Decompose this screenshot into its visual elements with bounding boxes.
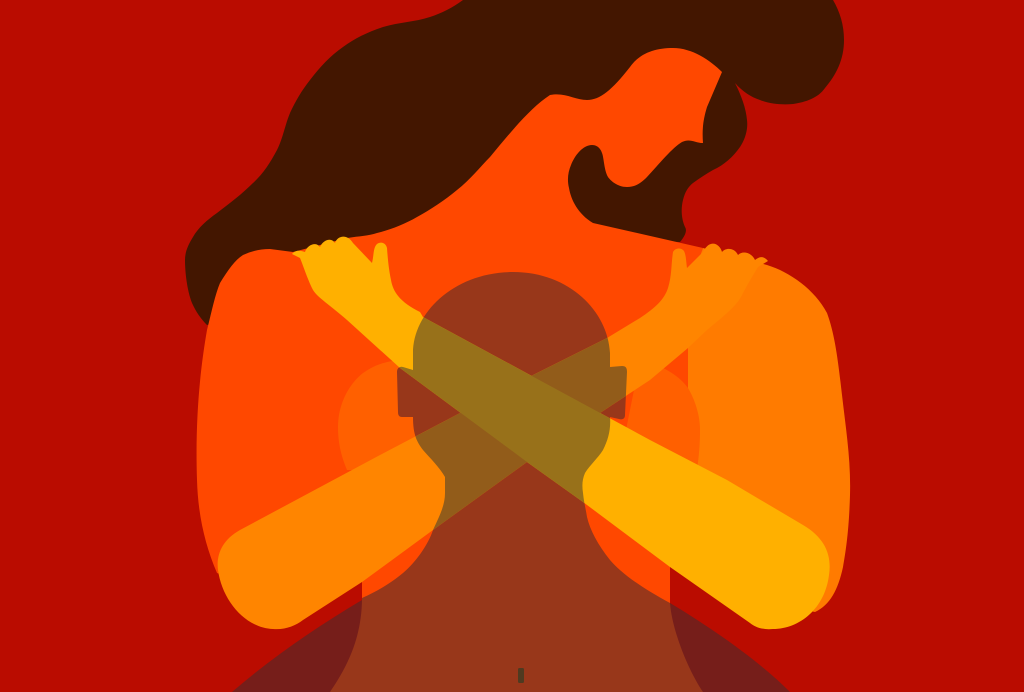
- arm reaching to the right shoulder: [218, 244, 768, 629]
- arm crossing over the head: [399, 318, 627, 530]
- right breast: [620, 360, 700, 500]
- hair: [185, 0, 844, 325]
- figure shoulders over background: [232, 600, 790, 692]
- navel: [518, 668, 524, 683]
- figure head and torso: [330, 272, 703, 692]
- woman body: [197, 48, 722, 603]
- arm reaching to the left shoulder: [292, 237, 830, 629]
- woman right side: [688, 248, 850, 612]
- left breast: [338, 360, 420, 470]
- illustration: woman embracing a figure with crossed arms: [185, 0, 850, 692]
